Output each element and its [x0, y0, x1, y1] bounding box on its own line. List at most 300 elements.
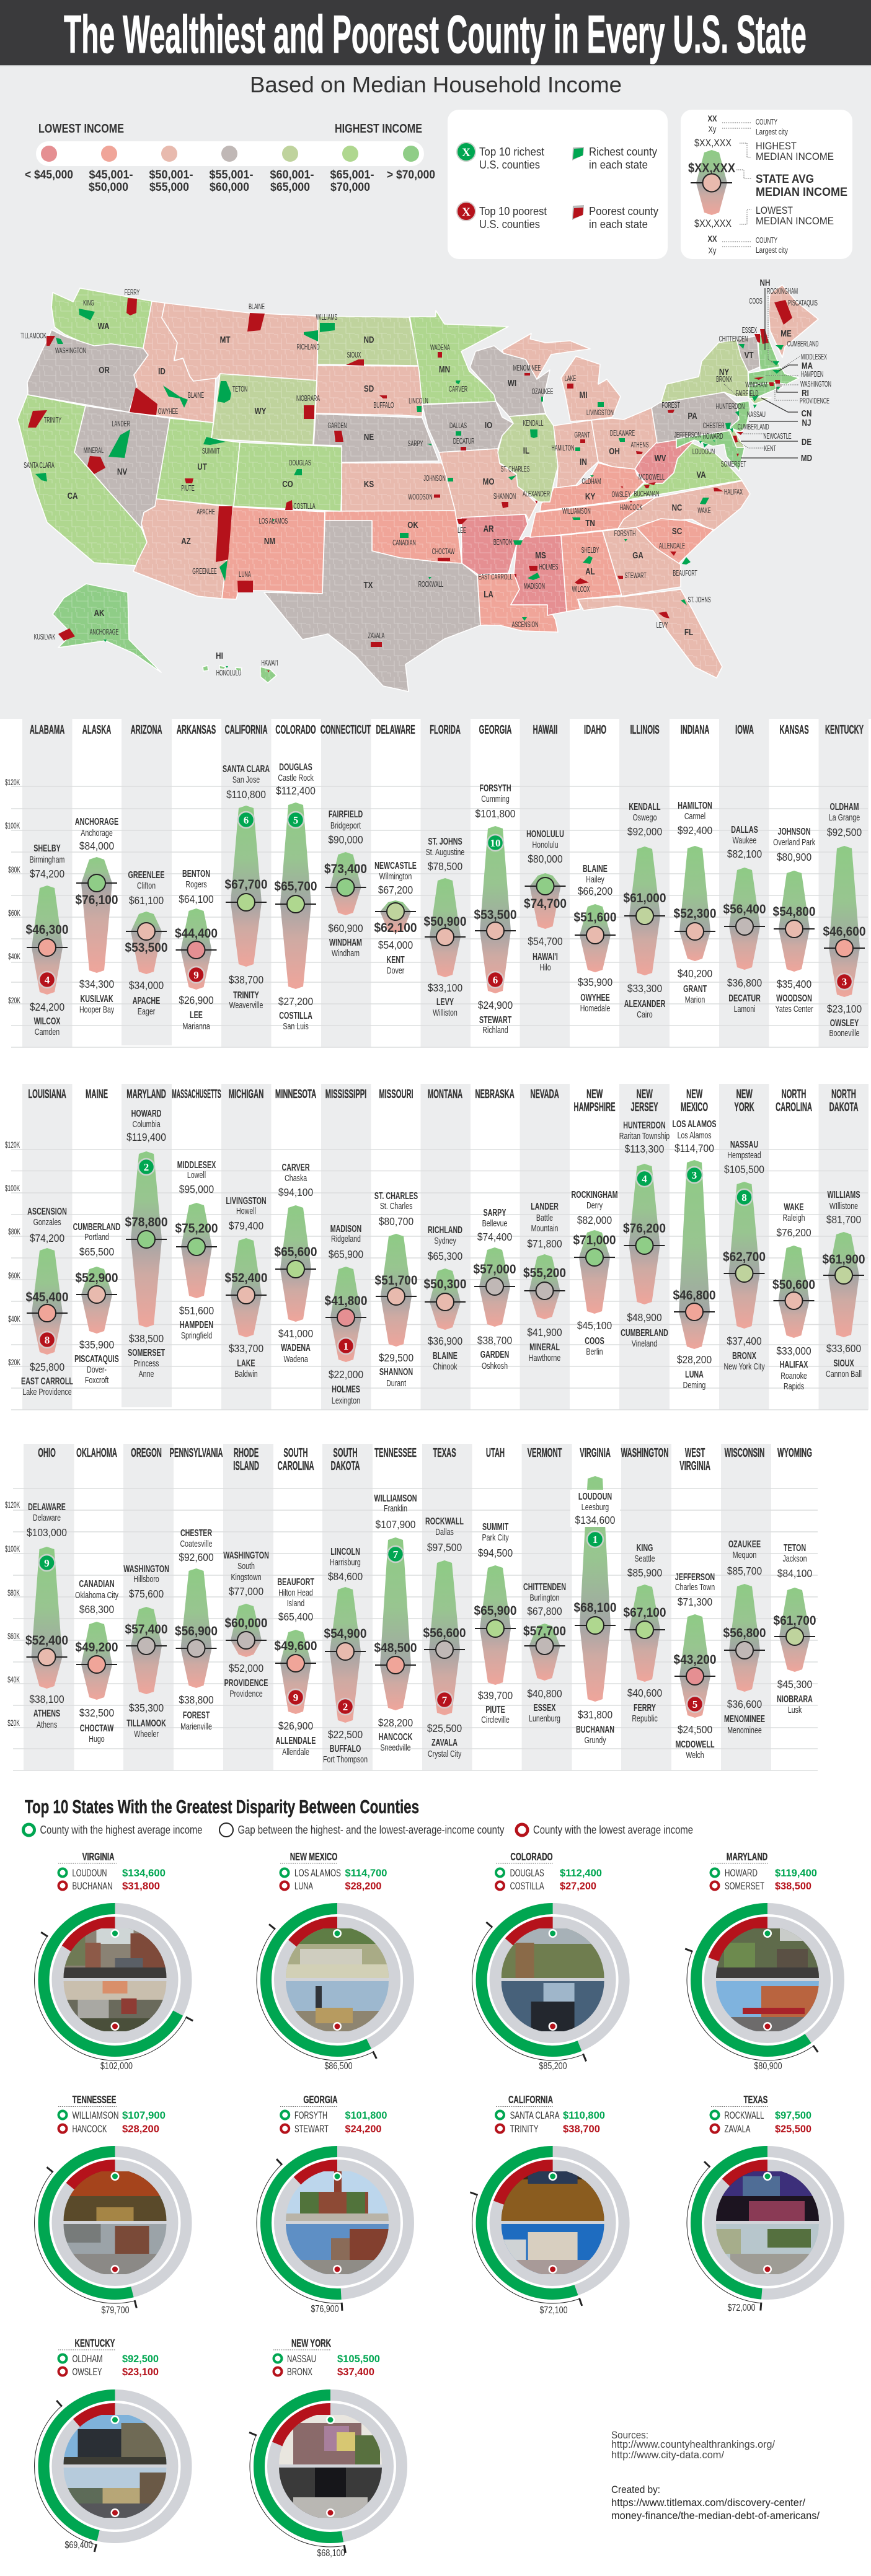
column: Wisconsin: $36,600 — [727, 1698, 762, 1710]
legend: income colour scale: > $70,000 — [387, 169, 435, 182]
axis labels row 2: $100K — [5, 1184, 20, 1193]
legend panel: map symbols: Top 10 poorest — [479, 205, 547, 218]
map: state abbreviations — [68, 278, 813, 661]
column: Vermont: Lunenburg — [529, 1713, 560, 1723]
column: Michigan: $52,400 — [224, 1271, 268, 1285]
column: New Mexico: $46,800 — [673, 1288, 716, 1303]
map: state abbreviations: WY — [255, 406, 266, 416]
column: Maryland — [125, 1088, 168, 1379]
column: Iowa: $36,800 — [727, 977, 762, 989]
map: county labels: JEFFERSON — [674, 431, 701, 440]
column: Ohio: $38,100 — [29, 1693, 64, 1705]
column: Colorado: COSTILLA — [279, 1010, 312, 1021]
column: Massachusetts: MASSACHUSETTS — [172, 1088, 221, 1101]
map: county labels: ST. JOHNS — [688, 596, 711, 605]
axis labels row 3: $100K — [5, 1545, 20, 1554]
column: North Carolina: $33,000 — [776, 1345, 811, 1357]
map: state abbreviations: ND — [364, 335, 374, 345]
column: Nevada: Mountain — [531, 1223, 558, 1233]
card: California: CALIFORNIA — [508, 2094, 553, 2106]
column: Pennsylvania: $56,900 — [175, 1624, 218, 1638]
column: Arizona: $53,500 — [125, 941, 168, 955]
column: North Dakota: Cannon Ball — [826, 1368, 862, 1379]
column: New Hampshire: $45,100 — [577, 1319, 612, 1332]
column: New Hampshire: Berlin — [586, 1346, 603, 1356]
column: Minnesota: CARVER — [282, 1162, 310, 1173]
map: county labels: FAIRFIELD — [736, 389, 759, 398]
column: Minnesota: $94,100 — [278, 1186, 313, 1198]
column: Mississippi: HOLMES — [332, 1384, 360, 1395]
column: Florida: $78,500 — [428, 860, 462, 873]
card: Kentucky: $69,400 — [64, 2540, 93, 2551]
column: Ohio: OHIO — [38, 1446, 56, 1460]
column: Florida: ST. JOHNS — [428, 836, 462, 847]
map: county labels — [20, 287, 831, 678]
column: Missouri: SHANNON — [379, 1366, 413, 1378]
legend panel: map symbols: X — [462, 146, 471, 159]
column: Pennsylvania: CHESTER — [180, 1528, 212, 1539]
column: Maine: CUMBERLAND — [73, 1221, 121, 1233]
map: county labels: LIVINGSTON — [586, 408, 614, 418]
map: richest counties in green — [35, 309, 784, 668]
column: South Dakota — [323, 1446, 368, 1764]
column: Maryland: $78,800 — [125, 1215, 168, 1229]
column: Iowa — [723, 723, 766, 1014]
map: county labels: TRINITY — [44, 416, 61, 425]
column: Indiana: Marion — [685, 994, 705, 1004]
column: Alaska: $76,100 — [75, 893, 118, 907]
column: Nevada: Battle — [536, 1212, 553, 1223]
map: county labels: APACHE — [197, 508, 215, 517]
column: Wisconsin: $85,700 — [727, 1565, 762, 1577]
legend panel: how to read a spindle: COUNTY — [756, 117, 777, 126]
column: Minnesota — [274, 1088, 317, 1364]
column: Florida: FLORIDA — [430, 723, 461, 737]
sources and credits: http://www.countyhealthrankings.org/ — [611, 2438, 775, 2450]
column: Virginia: LOUDOUN — [578, 1491, 612, 1502]
card: New Mexico: LOS ALAMOS — [294, 1867, 341, 1879]
column: Ohio: 9 — [44, 1557, 50, 1569]
column: West Virginia: WEST — [685, 1446, 705, 1460]
map: state abbreviations: FL — [684, 627, 693, 637]
legend panel: map symbols: in each state — [589, 159, 648, 171]
column: North Dakota: DAKOTA — [829, 1101, 859, 1114]
axis labels row 2 — [5, 1141, 20, 1368]
column: Oklahoma: Hugo — [89, 1733, 105, 1744]
map: county labels: LAKE — [565, 374, 576, 384]
map: state abbreviations: GA — [632, 550, 643, 560]
axis labels row 3: $20K — [7, 1719, 20, 1728]
column: Michigan: Howell — [236, 1205, 256, 1216]
map: county labels: MINERAL — [84, 446, 104, 455]
legend panel: map symbols: Richest county — [589, 146, 657, 158]
column: Maine: $52,900 — [75, 1271, 118, 1285]
map: state abbreviations: MI — [580, 390, 587, 400]
column: Arkansas: $44,400 — [175, 926, 218, 941]
column: Connecticut: CONNECTICUT — [321, 723, 371, 737]
legend panel: how to read a spindle: XX — [708, 113, 717, 123]
chart row 1: Alabama to Kentucky — [5, 719, 869, 1047]
map: state abbreviations: NE — [364, 432, 374, 442]
column: Rhode Island: $52,000 — [229, 1662, 263, 1674]
column: Arkansas: LEE — [190, 1009, 203, 1021]
card: Maryland — [685, 1851, 848, 2072]
column: Pennsylvania: Marienville — [180, 1721, 212, 1731]
column: New Hampshire: COOS — [585, 1335, 604, 1347]
column: Massachusetts: HAMPDEN — [180, 1319, 213, 1330]
column: West Virginia: $24,500 — [678, 1723, 712, 1736]
card: New Mexico: NEW MEXICO — [290, 1851, 338, 1863]
column: New Jersey: 4 — [642, 1173, 647, 1185]
column: Utah — [474, 1446, 517, 1725]
column: New Hampshire: HAMPSHIRE — [573, 1101, 616, 1114]
card: Virginia: $102,000 — [100, 2061, 133, 2072]
column: Montana: $65,300 — [428, 1250, 462, 1262]
column: Texas: $25,500 — [427, 1722, 462, 1734]
card: New Mexico: LUNA — [294, 1880, 313, 1892]
column: Louisiana: $74,200 — [30, 1232, 64, 1244]
column: Maryland: $38,500 — [129, 1332, 164, 1345]
map: county labels: MADISON — [524, 582, 545, 591]
column: Indiana: $92,400 — [678, 824, 712, 837]
map: state abbreviations: WI — [508, 378, 516, 388]
column: New Jersey: Raritan Township — [619, 1130, 670, 1141]
column: Iowa: Waukee — [733, 835, 756, 845]
map: state abbreviations: OK — [407, 520, 418, 530]
column: Nebraska: $57,000 — [473, 1262, 516, 1277]
map: county labels: BUCHANAN — [634, 490, 659, 499]
legend panel: how to read a spindle: Largest city — [756, 127, 788, 136]
map: county labels: HAMILTON — [552, 444, 574, 453]
column: California: $67,700 — [224, 877, 268, 892]
column: Illinois: $92,000 — [627, 825, 662, 838]
map: county labels: NEWCASTLE — [763, 432, 792, 441]
card: Virginia: LOUDOUN — [72, 1867, 107, 1879]
legend panel: how to read a spindle: MEDIAN INCOME — [756, 215, 834, 227]
column: South Dakota: LINCOLN — [330, 1546, 360, 1557]
column: Nebraska: $38,700 — [477, 1334, 512, 1347]
column: Delaware: DELAWARE — [376, 723, 415, 737]
map: county labels: WINDHAM — [745, 380, 767, 390]
card: Tennessee: TENNESSEE — [73, 2094, 116, 2106]
column: West Virginia: $71,300 — [678, 1596, 712, 1608]
column: Louisiana: 8 — [45, 1334, 50, 1346]
map: state abbreviations: NV — [117, 467, 127, 477]
column: Missouri: $51,700 — [374, 1273, 418, 1288]
column: Maine: $65,500 — [79, 1246, 114, 1258]
card: Kentucky: OLDHAM — [72, 2353, 103, 2365]
map: county labels: ZAVALA — [368, 631, 384, 641]
column: Ohio: Athens — [37, 1719, 58, 1730]
axis labels row 2: $120K — [5, 1141, 20, 1150]
column: Utah: UTAH — [486, 1446, 505, 1460]
card: Tennessee: $79,700 — [101, 2305, 130, 2316]
column: Oregon: $75,600 — [129, 1588, 164, 1600]
column: Arizona — [125, 723, 168, 1016]
column: Colorado: $27,200 — [278, 995, 313, 1008]
column: Hawaii: $54,700 — [528, 935, 563, 947]
column: Indiana: GRANT — [683, 983, 707, 995]
column: Delaware — [374, 723, 417, 975]
column: Delaware: KENT — [387, 954, 405, 965]
column: Georgia: FORSYTH — [479, 783, 511, 794]
column: Florida: Williston — [433, 1007, 458, 1018]
axis labels row 3: $120K — [5, 1501, 20, 1510]
column: New Hampshire: ROCKINGHAM — [572, 1189, 617, 1200]
map: county labels: TILLAMOOK — [20, 332, 46, 341]
column: Mississippi: $41,800 — [324, 1294, 368, 1308]
column: Connecticut: Bridgeport — [330, 820, 361, 830]
column: Pennsylvania: PENNSYLVANIA — [170, 1446, 223, 1460]
legend panel: how to read a spindle: HIGHEST — [756, 140, 797, 152]
column: Idaho: Homedale — [580, 1003, 610, 1013]
column: Washington: Seattle — [634, 1553, 655, 1563]
legend: income colour scale: $65,000 — [270, 181, 310, 194]
map: county labels: HUNTERDON — [716, 402, 745, 411]
map: county labels: WASHINGTON — [55, 346, 86, 356]
column: Texas — [423, 1446, 466, 1759]
map: county labels: HAMPDEN — [801, 370, 823, 379]
card: Tennessee — [35, 2094, 196, 2316]
card: Virginia: VIRGINIA — [82, 1851, 115, 1863]
map: county labels: WILLIAMSON — [562, 507, 591, 516]
map: county labels: SHELBY — [581, 546, 599, 555]
subtitle: Based on Median Household Income — [250, 72, 622, 97]
map: county labels: MENOMINEE — [513, 364, 541, 373]
map: state abbreviations: SC — [672, 526, 682, 536]
column: Montana: MONTANA — [428, 1088, 462, 1101]
column: North Carolina: $50,600 — [772, 1278, 815, 1292]
map: county labels: WASHINGTON — [800, 380, 831, 389]
legend: income colour scale: $50,001- — [149, 169, 193, 182]
column: Oklahoma: CHOCTAW — [80, 1723, 113, 1734]
legend: income colour scale: $60,000 — [210, 181, 249, 194]
axis labels row 1 — [5, 778, 20, 1006]
map: state abbreviations: ME — [780, 328, 792, 338]
card: New York: NASSAU — [287, 2353, 316, 2365]
column: New Hampshire: $82,000 — [577, 1214, 612, 1226]
column: Louisiana: Gonzales — [33, 1216, 61, 1227]
column: Rhode Island: $77,000 — [229, 1585, 263, 1598]
column: South Carolina: Island — [287, 1598, 304, 1608]
map: county labels: DECATUR — [453, 437, 475, 446]
card: New Mexico: $28,200 — [345, 1880, 382, 1892]
map: county labels: FOREST — [661, 401, 680, 410]
column: Arkansas — [175, 723, 218, 1031]
map: state abbreviations: CN — [802, 408, 811, 418]
map: county labels: COOS — [749, 297, 763, 306]
column: New York — [723, 1088, 766, 1371]
map: county labels: GREENLEE — [192, 567, 217, 576]
legend panel: map symbols: Poorest county — [589, 205, 658, 218]
column: Alabama: SHELBY — [33, 843, 61, 854]
map: county labels: SARPY — [408, 439, 423, 449]
column: West Virginia: Welch — [686, 1749, 704, 1760]
map: county labels: OWSLEY — [611, 490, 631, 499]
card: New York: BRONX — [287, 2366, 312, 2378]
map: county labels: CHOCTAW — [432, 547, 454, 556]
column: Vermont: CHITTENDEN — [523, 1581, 566, 1593]
column: Pennsylvania: $92,600 — [179, 1551, 214, 1563]
column: South Carolina: ALLENDALE — [276, 1735, 316, 1746]
map: state abbreviations: IN — [580, 457, 587, 467]
column: North Dakota: SIOUX — [833, 1358, 854, 1369]
column: North Dakota: $33,600 — [826, 1342, 861, 1355]
column: Alabama: $24,200 — [30, 1001, 64, 1013]
column: New Mexico: $28,200 — [677, 1353, 712, 1366]
column: Kansas: Yates Center — [775, 1003, 813, 1014]
card: Colorado: $27,200 — [560, 1880, 596, 1892]
map: county labels: BENTON — [493, 538, 512, 547]
column: Oregon: WASHINGTON — [123, 1563, 169, 1575]
column: Virginia: Leesburg — [581, 1501, 609, 1512]
map: county labels: ALLENDALE — [659, 542, 685, 551]
column: Tennessee: HANCOCK — [379, 1731, 413, 1743]
map: county labels: PISCATAQUIS — [788, 299, 818, 308]
column: Kentucky — [823, 723, 866, 1038]
column: Alaska: $84,000 — [79, 840, 114, 852]
column: North Dakota: NORTH — [831, 1088, 856, 1101]
card: Texas: $97,500 — [775, 2109, 811, 2121]
column: North Carolina: $76,200 — [776, 1226, 811, 1239]
column: Tennessee — [374, 1446, 417, 1752]
column: New York: $37,400 — [727, 1335, 762, 1347]
map: poorest counties in red — [28, 298, 792, 672]
column: Maryland: 2 — [144, 1161, 149, 1173]
column: Louisiana: ASCENSION — [27, 1206, 67, 1217]
card: Maryland: $38,500 — [775, 1880, 811, 1892]
column: Tennessee: 7 — [393, 1549, 399, 1560]
axis labels row 1: $20K — [8, 996, 20, 1006]
column: Vermont: $67,800 — [527, 1605, 562, 1617]
column: Virginia — [570, 1446, 620, 1745]
column: Massachusetts: Springfield — [181, 1330, 212, 1340]
column: South Carolina: $26,900 — [278, 1720, 313, 1732]
column: New York: 8 — [741, 1192, 747, 1203]
map: county labels: KENDALL — [523, 419, 544, 428]
map: county labels: BUFFALO — [373, 401, 394, 410]
column: Maryland: SOMERSET — [128, 1347, 166, 1358]
card: Georgia: STEWART — [294, 2123, 329, 2135]
column: Idaho: IDAHO — [584, 723, 606, 737]
legend panel: how to read a spindle: Xy — [708, 124, 717, 134]
legend: income colour scale: < $45,000 — [25, 169, 73, 182]
legend panel: how to read a spindle — [681, 110, 852, 259]
column: North Carolina: CAROLINA — [776, 1101, 812, 1114]
column: North Dakota: WIllistone — [829, 1200, 858, 1211]
column: South Dakota: $84,600 — [328, 1570, 363, 1583]
column: Tennessee: $48,500 — [374, 1641, 417, 1655]
legend panel: map symbols: in each state — [589, 218, 648, 231]
column: California: $38,700 — [229, 974, 263, 986]
column: Hawaii: $74,700 — [524, 897, 567, 911]
map: state abbreviations: LA — [484, 589, 493, 599]
column: Georgia: Richland — [482, 1024, 508, 1035]
map: county labels: CHESTER — [703, 421, 725, 431]
column: Louisiana: LOUISIANA — [28, 1088, 66, 1101]
map: county labels: LEVY — [657, 621, 668, 630]
column: Oklahoma: OKLAHOMA — [76, 1446, 117, 1460]
axis labels row 1: $100K — [5, 822, 20, 831]
column: Virginia: Grundy — [585, 1734, 606, 1745]
map: county labels: SUMMIT — [202, 447, 220, 456]
column: Maine: Portland — [84, 1231, 109, 1242]
column: Louisiana: Lake Providence — [22, 1386, 72, 1397]
column: Montana: Chinook — [433, 1361, 458, 1371]
column: Wyoming: $61,700 — [773, 1614, 816, 1628]
card: Colorado: COSTILLA — [510, 1880, 544, 1892]
column: Montana: BLAINE — [433, 1350, 458, 1361]
column: South Dakota: $22,500 — [328, 1728, 363, 1741]
column: Tennessee: Franklin — [384, 1503, 407, 1513]
column: Indiana: $40,200 — [678, 967, 712, 980]
legend panel: how to read a spindle: XX — [708, 234, 717, 244]
legend panel: map symbols: U.S. counties — [479, 218, 540, 231]
legend panel: how to read a spindle: LOWEST — [756, 204, 793, 216]
column: Kansas: Overland Park — [773, 837, 816, 847]
map: county labels: ASCENSION — [512, 620, 538, 630]
column: New Mexico: Deming — [683, 1379, 705, 1390]
column: New York: New York City — [723, 1361, 765, 1371]
column: Michigan: MICHIGAN — [229, 1088, 263, 1101]
column: Arizona: Eager — [138, 1006, 156, 1016]
map: county labels: LOS ALAMOS — [259, 517, 288, 526]
column: Alaska: ANCHORAGE — [75, 816, 118, 827]
column: Hawaii: HAWAII — [533, 723, 557, 737]
map: county labels: JOHNSON — [423, 474, 446, 483]
column: Nebraska: SARPY — [484, 1207, 506, 1218]
column: South Dakota: Harrisburg — [330, 1557, 361, 1567]
column: Tennessee: $28,200 — [378, 1717, 413, 1729]
column: Washington: Republic — [632, 1713, 658, 1723]
column: Wisconsin: Mequon — [733, 1549, 756, 1560]
column: South Carolina: $49,600 — [274, 1639, 317, 1653]
map: county labels: CANADIAN — [392, 538, 416, 548]
map: county labels: EAST CARROLL — [478, 573, 513, 582]
column: Mississippi — [324, 1088, 368, 1405]
column: Oregon: Wheeler — [134, 1728, 159, 1739]
map: state shapes — [17, 285, 818, 692]
column: Texas: ZAVALA — [431, 1737, 458, 1748]
column: New Mexico — [672, 1088, 717, 1390]
map: county labels: CARVER — [449, 385, 467, 394]
column: Maine: Foxcroft — [85, 1374, 109, 1385]
map: state abbreviations: MO — [483, 477, 494, 486]
column: Illinois: $33,300 — [627, 982, 662, 995]
column: Missouri — [374, 1088, 418, 1388]
column: Idaho: OWYHEE — [580, 992, 610, 1003]
column: Vermont: ESSEX — [534, 1702, 555, 1713]
column: Michigan: LAKE — [237, 1358, 255, 1369]
column: Colorado — [274, 723, 317, 1031]
column: Missouri: MISSOURI — [379, 1088, 413, 1101]
column: Montana — [423, 1088, 467, 1371]
sources and credits: Sources: — [611, 2429, 648, 2441]
map: county labels: OZAUKEE — [532, 387, 553, 397]
card: Virginia: BUCHANAN — [72, 1880, 113, 1892]
column: Massachusetts: $51,600 — [179, 1304, 214, 1317]
column: Ohio: $52,400 — [25, 1633, 68, 1648]
map: state abbreviations: MD — [801, 453, 812, 463]
disparity legend — [24, 1823, 693, 1837]
legend: income colour scale: $55,000 — [149, 181, 189, 194]
column: Iowa: $82,100 — [727, 848, 762, 860]
map: state abbreviations: NC — [672, 503, 683, 512]
column: Vermont: VERMONT — [528, 1446, 562, 1460]
column: Idaho — [573, 723, 617, 1013]
map: county labels: HALIFAX — [724, 488, 743, 497]
column: Missouri: $29,500 — [379, 1352, 413, 1364]
